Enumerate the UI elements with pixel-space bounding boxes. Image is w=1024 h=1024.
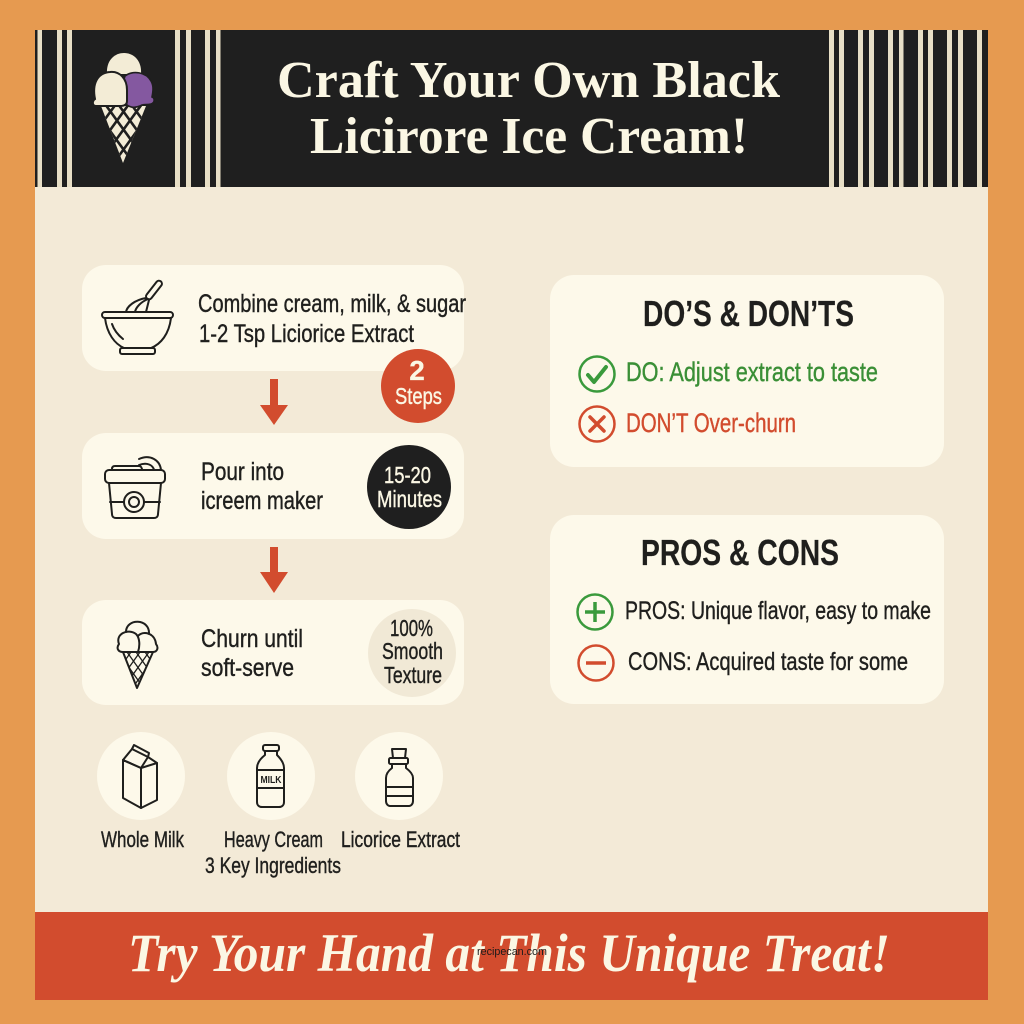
panel: do's and don'ts [550, 275, 944, 467]
step 2 text: icreem maker [201, 487, 323, 515]
step 1 text [198, 290, 466, 348]
badge: 2 steps [381, 349, 455, 423]
do text: DO: Adjust extract to taste [626, 357, 878, 387]
ingredient: whole milk [97, 732, 185, 852]
header banner [35, 30, 988, 187]
badge: 15-20 minutes: Minutes [377, 486, 442, 512]
watermark: recipecan.com [477, 946, 547, 958]
badge: 15-20 minutes: 15-20 [384, 462, 431, 488]
step 3 text: soft-serve [201, 654, 294, 682]
title: Craft Your Own Black [277, 52, 780, 109]
icon: ice cream cone logo [94, 53, 154, 163]
step 2 card [82, 433, 464, 539]
cons text: CONS: Acquired taste for some [628, 648, 908, 676]
title [277, 52, 780, 165]
icon: milk bottle [257, 745, 284, 807]
step 3 text: Churn until [201, 625, 303, 653]
icon: minus [578, 646, 614, 680]
ingredient: whole milk: Whole Milk [101, 827, 185, 852]
heading: PROS & CONS [641, 532, 839, 573]
ingredients caption: 3 Key Ingredients [205, 853, 341, 878]
cream content panel [35, 187, 988, 913]
arrow 2 [260, 547, 288, 593]
step 1 card [82, 265, 466, 371]
icon: ice cream maker [105, 457, 165, 518]
ingredient: licorice extract: Licorice Extract [341, 827, 460, 852]
step 1 text: 1-2 Tsp Liciorice Extract [199, 320, 414, 348]
heading: DO’S & DON’TS [643, 293, 854, 334]
badge: 100% smooth texture [368, 609, 456, 697]
badge: 2 steps: Steps [395, 383, 442, 409]
step 2 text: Pour into [201, 458, 284, 486]
ingredient: licorice extract [341, 732, 460, 852]
ingredient: heavy cream [224, 732, 323, 852]
footer slogan: Try Your Hand at This Unique Treat! [128, 923, 890, 983]
icon: ice cream cone outline [116, 620, 158, 689]
panel: pros and cons [550, 515, 944, 704]
don't text: DON’T Over-churn [626, 408, 796, 438]
step 3 text [201, 625, 303, 682]
badge: 100% smooth texture: 100% [390, 615, 433, 641]
badge: 2 steps: 2 [409, 355, 425, 386]
badge: 100% smooth texture: Texture [384, 662, 442, 688]
badge: 15-20 minutes [367, 445, 451, 529]
step 3 card [82, 600, 464, 705]
footer banner [35, 912, 988, 1000]
icon: milk carton [123, 745, 157, 808]
icon: cross [580, 406, 614, 442]
arrow 1 [260, 379, 288, 425]
pros text: PROS: Unique flavor, easy to make [625, 597, 931, 625]
icon: plus [578, 594, 612, 630]
ingredient: heavy cream: MILK [260, 775, 282, 786]
step 2 text [201, 458, 323, 515]
icon: mixing bowl and whisk [102, 279, 173, 354]
step 1 text: Combine cream, milk, & sugar [198, 290, 466, 318]
ingredient: heavy cream: Heavy Cream [224, 827, 323, 852]
icon: check [580, 356, 614, 392]
icon: extract bottle [386, 749, 413, 806]
title: Licirore Ice Cream! [310, 108, 748, 165]
badge: 100% smooth texture: Smooth [382, 638, 443, 664]
